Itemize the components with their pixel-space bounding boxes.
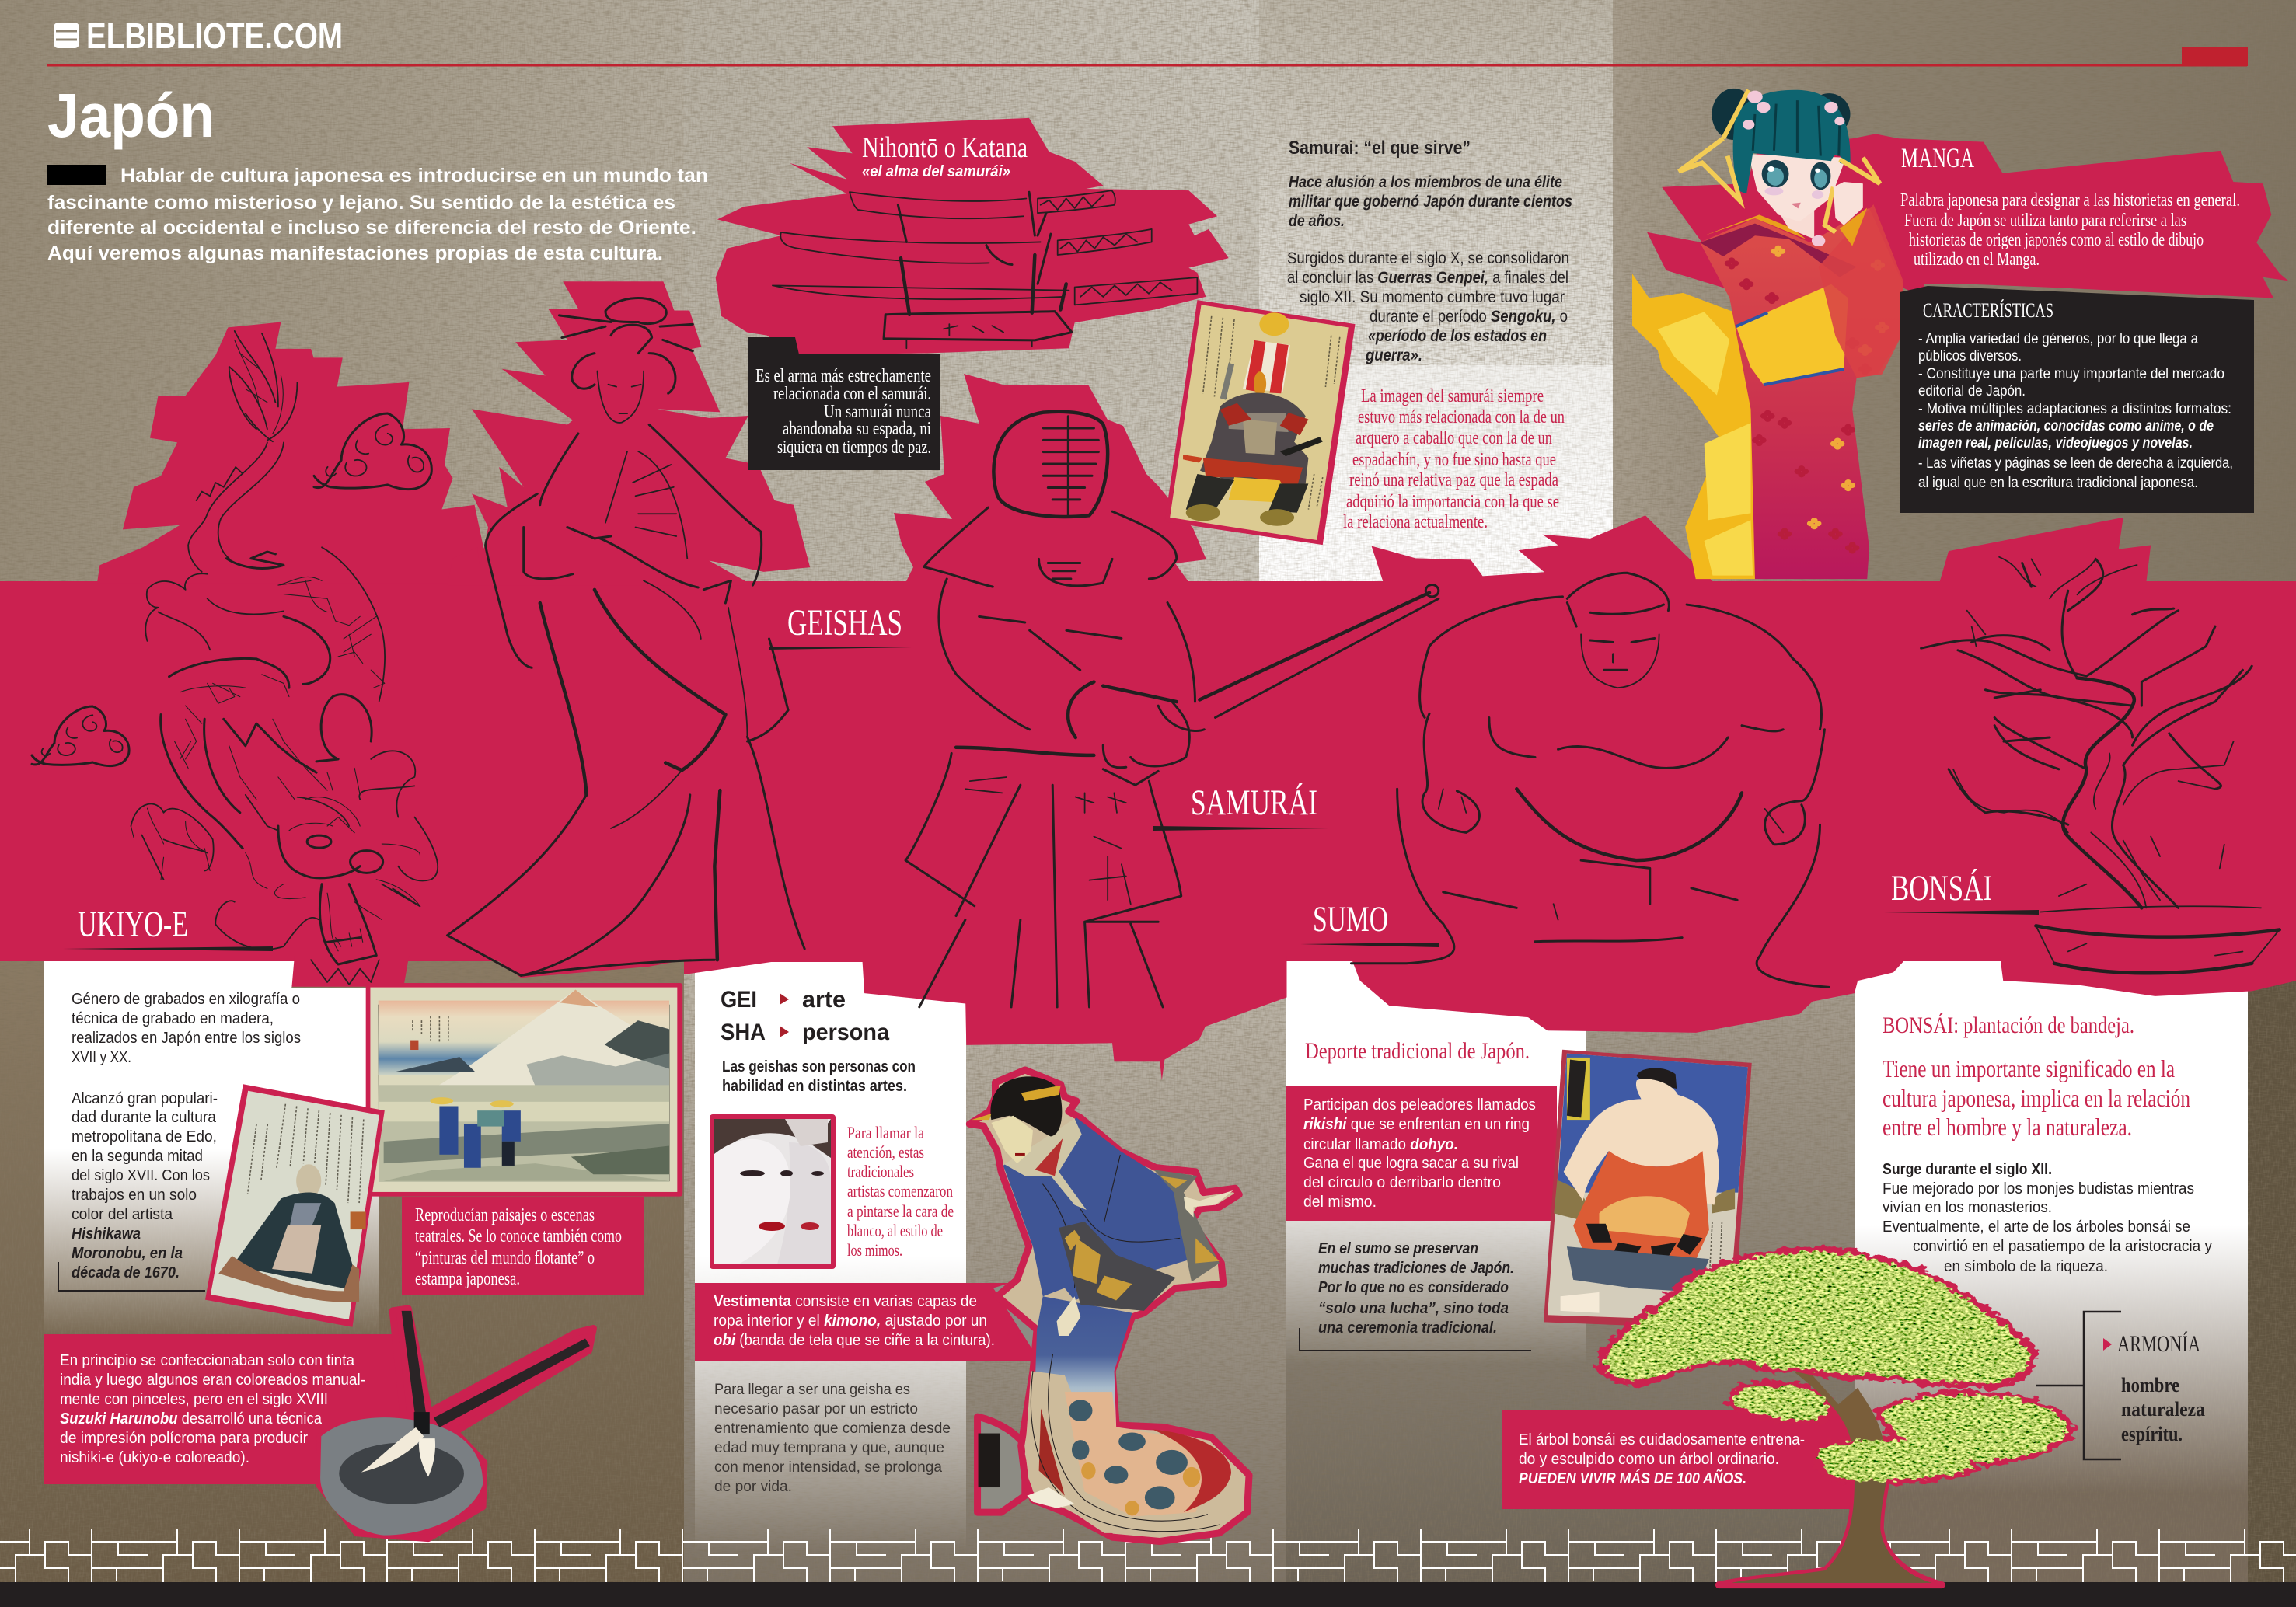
picture: sumo woodblock card bbox=[1544, 1050, 1752, 1330]
label: SUMO bbox=[1300, 899, 1439, 947]
text: características: - Motiva múltiples adaptaciones a distintos formatos: bbox=[1918, 401, 2231, 417]
panel: red box ukiyo-e bbox=[44, 1334, 401, 1484]
panel: red box rikishi: del círculo o derribarlo dentro bbox=[1303, 1174, 1501, 1191]
right sleeve lining bbox=[1154, 1170, 1220, 1282]
silhouette bbox=[969, 1070, 1249, 1542]
text: tradiciones: “solo una lucha”, sino toda bbox=[1318, 1300, 1509, 1317]
panel: geisha text bbox=[721, 987, 916, 1095]
text: katana black box: abandonaba su espada, ni bbox=[783, 419, 931, 439]
panel: ukiyo-e text: Género de grabados en xilografía o bbox=[72, 991, 300, 1008]
panel: red box rikishi: del mismo. bbox=[1303, 1194, 1377, 1211]
text: bonsai body: Surge durante el siglo XII. bbox=[1883, 1161, 2052, 1178]
text: características: públicos diversos. bbox=[1918, 348, 2022, 364]
text: geisha training: Para llegar a ser una geisha es bbox=[714, 1382, 910, 1398]
text: caption: Reproducían paisajes o escenas bbox=[415, 1205, 595, 1225]
text: bonsai body: vivían en los monasterios. bbox=[1883, 1199, 2052, 1216]
callout: armonía: ARMONÍA bbox=[2117, 1331, 2200, 1357]
brush: samurai bottom bbox=[684, 956, 1287, 1080]
text: caption: “pinturas del mundo flotante” o bbox=[415, 1248, 595, 1268]
text: bonsai headings bbox=[1883, 1013, 2190, 1141]
callout: armonía: espíritu. bbox=[2121, 1423, 2183, 1445]
manga text: MANGA bbox=[1901, 142, 1974, 173]
panel: ukiyo-e text: Hishikawa bbox=[72, 1225, 141, 1243]
manga girl illustration bbox=[1632, 89, 1903, 579]
icon: sumo line art bbox=[1351, 573, 1829, 987]
samurai red text: estuvo más relacionada con la de un bbox=[1358, 407, 1565, 427]
obi wings bbox=[1632, 274, 1759, 579]
intro text: Aquí veremos algunas manifestaciones propias de esta cultura. bbox=[47, 242, 663, 264]
label: SAMURÁI: SAMURÁI bbox=[1191, 783, 1317, 823]
icon: stacked books bbox=[54, 23, 79, 48]
panel: ukiyo-e text: en la segunda mitad bbox=[72, 1148, 203, 1165]
katana heading: «el alma del samurái» bbox=[862, 163, 1010, 180]
text: bonsai body: convirtió en el pasatiempo de la aristocracia y bbox=[1913, 1238, 2212, 1255]
gei sha etymology bbox=[721, 987, 889, 1045]
panel: red box bonsai: do y esculpido como un árbol ordinario. bbox=[1519, 1451, 1779, 1468]
text: vestimenta: ropa interior y el kimono, ajustado por un bbox=[714, 1312, 987, 1330]
text: características: - Constituye una parte muy importante del mercado bbox=[1918, 366, 2224, 382]
panel: red box bonsai bbox=[1502, 1410, 1851, 1509]
text: geisha training bbox=[714, 1382, 951, 1495]
text: características: - Las viñetas y páginas se leen de derecha a izquierda, bbox=[1918, 455, 2233, 472]
panel: ukiyo-e text: metropolitana de Edo, bbox=[72, 1128, 217, 1145]
samurai woodblock card bbox=[1165, 300, 1356, 545]
white fading panels bbox=[44, 957, 2248, 1551]
cloth behind bbox=[978, 1417, 1025, 1512]
text: geisha red note bbox=[847, 1123, 954, 1260]
brush: geisha bbox=[447, 281, 810, 585]
panel: ukiyo-e text: color del artista bbox=[72, 1206, 173, 1223]
katana illustration bbox=[773, 190, 1197, 348]
panel: red box bonsai: PUEDEN VIVIR MÁS DE 100 AÑOS. bbox=[1519, 1469, 1746, 1487]
manga text: historietas de origen japonés como al estilo de dibujo bbox=[1909, 230, 2204, 250]
text: geisha red note: tradicionales bbox=[847, 1162, 914, 1181]
samurai red text: adquirió la importancia con la que se bbox=[1346, 492, 1559, 512]
manga text: Fuera de Japón se utiliza tanto para referirse a las bbox=[1904, 211, 2186, 231]
text: katana black box: relacionada con el samurái. bbox=[773, 384, 931, 404]
text: caption: teatrales. Se lo conoce también como bbox=[415, 1226, 622, 1246]
text: katana black box: siquiera en tiempos de paz. bbox=[777, 437, 931, 458]
panel: sumo texts bbox=[1286, 1038, 1557, 1351]
text: características: CARACTERÍSTICAS bbox=[1923, 299, 2053, 322]
panel: red box rikishi: rikishi que se enfrentan en un ring bbox=[1303, 1116, 1530, 1133]
text: ukiyo-e technique: mente con pinceles, pero en el siglo XVIII bbox=[60, 1391, 328, 1408]
text: geisha red note: artistas comenzaron bbox=[847, 1181, 953, 1201]
samurai text panel: siglo XII. Su momento cumbre tuvo lugar bbox=[1300, 288, 1565, 306]
icon: cloud lower bbox=[32, 706, 129, 766]
text: vestimenta bbox=[714, 1293, 995, 1349]
trunk outline bbox=[1719, 1479, 1942, 1585]
samurai text panel: Hace alusión a los miembros de una élite bbox=[1289, 173, 1562, 191]
samurai red text: La imagen del samurái siempre bbox=[1361, 386, 1544, 406]
label: UKIYO-E: UKIYO-E bbox=[78, 904, 188, 945]
picture: geisha faces photo bbox=[710, 1114, 836, 1269]
panel: red box bonsai: El árbol bonsái es cuidadosamente entrena- bbox=[1519, 1431, 1805, 1448]
panel: ukiyo-e text: Alcanzó gran populari- bbox=[72, 1090, 218, 1107]
samurai red text: arquero a caballo que con la de un bbox=[1356, 428, 1552, 448]
text: tradiciones: una ceremonia tradicional. bbox=[1318, 1319, 1497, 1337]
text: características bbox=[1918, 299, 2233, 491]
label: SUMO: SUMO bbox=[1313, 899, 1388, 939]
panel: red box rikishi: Participan dos peleadores llamados bbox=[1303, 1096, 1536, 1114]
panel: geisha text: Las geishas son personas con bbox=[722, 1058, 916, 1075]
logo text: ELBIBLIOTE.COM bbox=[86, 16, 343, 56]
text: geisha red note: a pintarse la cara de bbox=[847, 1201, 954, 1221]
header: logo bbox=[54, 16, 343, 56]
panel: red box rikishi bbox=[1286, 1086, 1557, 1221]
panel: ukiyo-e text: trabajos en un solo bbox=[72, 1187, 197, 1204]
brush: dragon bottom bbox=[291, 956, 709, 987]
text: geisha red note: atención, estas bbox=[847, 1142, 924, 1162]
picture: portrait print bbox=[205, 1084, 385, 1327]
samurai red text: la relaciona actualmente. bbox=[1343, 512, 1488, 532]
panel: vestimenta bbox=[695, 1283, 1037, 1361]
samurai red text bbox=[1343, 386, 1565, 532]
samurai text panel: «período de los estados en bbox=[1368, 327, 1547, 345]
text: vestimenta: Vestimenta consiste en varias capas de bbox=[714, 1293, 977, 1310]
text: características: series de animación, conocidas como anime, o de bbox=[1918, 418, 2214, 434]
label: BONSÁI: BONSÁI bbox=[1891, 868, 1992, 908]
icon: cloud upper bbox=[314, 413, 431, 490]
brush shapes bbox=[97, 118, 2296, 1080]
text: geisha training: entrenamiento que comienza desde bbox=[714, 1421, 951, 1437]
icon: dragon line art bbox=[131, 331, 438, 985]
label: SAMURÁI bbox=[1153, 783, 1328, 831]
panel: katana black box bbox=[748, 337, 940, 470]
text: geisha training: de por vida. bbox=[714, 1479, 792, 1495]
samurai red text: espadachín, y no fue sino hasta que bbox=[1352, 450, 1556, 470]
text: katana black box bbox=[755, 366, 931, 458]
text: ukiyo-e technique: india y luego algunos eran coloreados manual- bbox=[60, 1372, 365, 1389]
hair and face bbox=[990, 1076, 1062, 1136]
icon: samurai line art bbox=[905, 412, 1439, 1007]
manga text: utilizado en el Manga. bbox=[1914, 249, 2040, 270]
label: GEISHAS bbox=[769, 602, 912, 650]
panel: geisha text: habilidad en distintas artes. bbox=[722, 1078, 907, 1095]
red band bbox=[0, 581, 2296, 961]
panel: ukiyo-e text: realizados en Japón entre los siglos bbox=[72, 1030, 301, 1047]
brush: bonsai top bbox=[1939, 518, 2151, 583]
text: geisha red note: los mimos. bbox=[847, 1240, 902, 1260]
panel: ukiyo-e text bbox=[58, 991, 301, 1291]
text: geisha red note: Para llamar la bbox=[847, 1123, 924, 1142]
tree red outline bbox=[1600, 1248, 2074, 1483]
text: bonsai headings: BONSÁI: plantación de bandeja. bbox=[1883, 1013, 2134, 1038]
text: bonsai body: Fue mejorado por los monjes budistas mientras bbox=[1883, 1180, 2194, 1197]
trunk bbox=[1732, 1479, 1932, 1583]
text: vestimenta: obi (banda de tela que se ciñe a la cintura). bbox=[714, 1332, 995, 1349]
text: ukiyo-e technique: nishiki-e (ukiyo-e coloreado). bbox=[60, 1449, 249, 1466]
title: Japón bbox=[47, 81, 215, 150]
panel: ukiyo-e text: técnica de grabado en madera, bbox=[72, 1010, 274, 1027]
text: ukiyo-e technique: de impresión polícroma para producir bbox=[60, 1430, 308, 1447]
samurai text panel: de años. bbox=[1289, 212, 1345, 230]
callout: armonía: hombre bbox=[2121, 1374, 2179, 1396]
samurai text panel: militar que gobernó Japón durante cientos bbox=[1289, 193, 1572, 211]
brush: manga bbox=[1647, 134, 2288, 298]
kimono train bbox=[1025, 1371, 1239, 1533]
picture: Fuji landscape print bbox=[366, 983, 682, 1197]
intro text: fascinante como misterioso y lejano. Su sentido de la estética es bbox=[47, 192, 675, 214]
text: ukiyo-e technique: En principio se confeccionaban solo con tinta bbox=[60, 1352, 355, 1369]
callout: armonía: naturaleza bbox=[2121, 1398, 2205, 1421]
text: caption: estampa japonesa. bbox=[415, 1269, 520, 1289]
text: características: al igual que en la escritura tradicional japonesa. bbox=[1918, 475, 2198, 491]
samurai text panel: Samurai: “el que sirve” bbox=[1289, 138, 1471, 159]
text: características: imagen real, películas, videojuegos y novelas. bbox=[1918, 435, 2193, 451]
kimono bbox=[1700, 207, 1903, 579]
text: bonsai headings: cultura japonesa, implica en la relación bbox=[1883, 1084, 2190, 1112]
picture: bonsai tree bbox=[1600, 1248, 2074, 1585]
text: ukiyo-e technique bbox=[60, 1352, 365, 1466]
katana heading: Nihontō o Katana bbox=[862, 131, 1028, 164]
text: tradiciones: Por lo que no es considerado bbox=[1318, 1279, 1509, 1296]
text: bonsai headings: entre el hombre y la naturaleza. bbox=[1883, 1113, 2132, 1141]
text: bonsai body bbox=[1883, 1161, 2212, 1275]
samurai text panel bbox=[1287, 138, 1572, 364]
picture: geisha woodblock figure bbox=[969, 1070, 1249, 1542]
text: bonsai headings: Tiene un importante significado en la bbox=[1883, 1054, 2175, 1082]
blue kimono bbox=[1003, 1117, 1192, 1301]
samurai text panel: durante el período Sengoku, o bbox=[1370, 308, 1568, 326]
gei sha etymology: arte bbox=[802, 987, 846, 1013]
ribbons bbox=[1679, 90, 1880, 232]
icon: inkstone and brushes bbox=[319, 1309, 593, 1539]
sleeve bbox=[1819, 204, 1903, 378]
panel: ukiyo-e text: del siglo XVII. Con los bbox=[72, 1167, 210, 1184]
panel: ukiyo-e text: dad durante la cultura bbox=[72, 1109, 217, 1126]
brush: katana bbox=[716, 118, 1229, 355]
panel: ukiyo-e text: Moronobu, en la bbox=[72, 1245, 183, 1262]
manga text bbox=[1900, 142, 2240, 270]
text: características: - Amplia variedad de géneros, por lo que llega a bbox=[1918, 331, 2198, 347]
panel: red box rikishi: circular llamado dohyo. bbox=[1303, 1136, 1458, 1153]
intro text bbox=[47, 165, 708, 264]
flowers bbox=[1743, 91, 1844, 246]
header rule and tab bbox=[47, 47, 2248, 67]
collar bbox=[1004, 1118, 1087, 1210]
text: geisha training: necesario pasar por un estricto bbox=[714, 1401, 918, 1417]
gei sha etymology: GEI bbox=[721, 987, 757, 1013]
samurai text panel: al concluir las Guerras Genpei, a finales del bbox=[1287, 269, 1568, 287]
section labels bbox=[63, 602, 2039, 951]
hair bbox=[1712, 89, 1756, 140]
samurai red text: reinó una relativa paz que la espada bbox=[1349, 470, 1558, 490]
panel: ukiyo-e text: década de 1670. bbox=[72, 1264, 180, 1281]
brush: sumo top bbox=[1372, 515, 1715, 583]
brush: dragon bbox=[97, 322, 491, 583]
text: geisha training: edad muy temprana y que, aunque bbox=[714, 1440, 944, 1456]
text: deporte: Deporte tradicional de Japón. bbox=[1305, 1038, 1530, 1064]
gei sha etymology: persona bbox=[802, 1020, 889, 1045]
panel: ukiyo-e text: XVII y XX. bbox=[72, 1049, 131, 1066]
panel: manga características bbox=[1900, 286, 2254, 513]
label: UKIYO-E bbox=[63, 904, 273, 951]
callout: armonía bbox=[2036, 1312, 2205, 1459]
gei sha etymology: SHA bbox=[721, 1020, 766, 1045]
obi bbox=[1736, 284, 1848, 385]
intro text: Hablar de cultura japonesa es introducirse en un mundo tan bbox=[120, 165, 708, 186]
intro text: diferente al occidental e incluso se diferencia del resto de Oriente. bbox=[47, 217, 696, 239]
text: geisha red note: blanco, al estilo de bbox=[847, 1221, 943, 1240]
foliage bbox=[1605, 1251, 2068, 1480]
icon: geisha line art bbox=[447, 298, 804, 975]
brush: samurai bbox=[894, 374, 1206, 583]
text: bonsai body: Eventualmente, el arte de los árboles bonsái se bbox=[1883, 1218, 2190, 1236]
text: geisha training: con menor intensidad, se prolonga bbox=[714, 1459, 942, 1476]
panel: red box rikishi: Gana el que logra sacar a su rival bbox=[1303, 1155, 1519, 1172]
obi bbox=[1059, 1222, 1176, 1311]
text: caption bbox=[415, 1205, 622, 1289]
text: tradiciones: En el sumo se preservan bbox=[1318, 1240, 1478, 1257]
text: características: editorial de Japón. bbox=[1918, 383, 2026, 399]
text: bonsai body: en símbolo de la riqueza. bbox=[1944, 1258, 2108, 1275]
text: katana black box: Un samurái nunca bbox=[824, 402, 931, 422]
neck and face bbox=[1776, 207, 1814, 239]
decorative key pattern bbox=[0, 1529, 2296, 1582]
icon: bonsai line art bbox=[1921, 557, 2280, 973]
panel: bonsai texts bbox=[1883, 1013, 2212, 1275]
brush: bonsai bottom bbox=[2000, 956, 2296, 996]
katana heading bbox=[862, 131, 1028, 180]
label: GEISHAS: GEISHAS bbox=[787, 602, 902, 643]
text: tradiciones bbox=[1300, 1240, 1531, 1351]
hand bbox=[1834, 182, 1863, 225]
text: katana black box: Es el arma más estrechamente bbox=[755, 366, 931, 386]
panel: red caption landscape bbox=[402, 1197, 644, 1295]
brush: sumo bottom bbox=[1350, 956, 1903, 1033]
bottom bar bbox=[0, 1582, 2296, 1607]
text: ukiyo-e technique: Suzuki Harunobu desarrolló una técnica bbox=[60, 1410, 323, 1427]
samurai text panel: Surgidos durante el siglo X, se consolidaron bbox=[1287, 249, 1569, 267]
text: tradiciones: muchas tradiciones de Japón. bbox=[1318, 1260, 1514, 1277]
samurai text panel: guerra». bbox=[1365, 347, 1422, 364]
